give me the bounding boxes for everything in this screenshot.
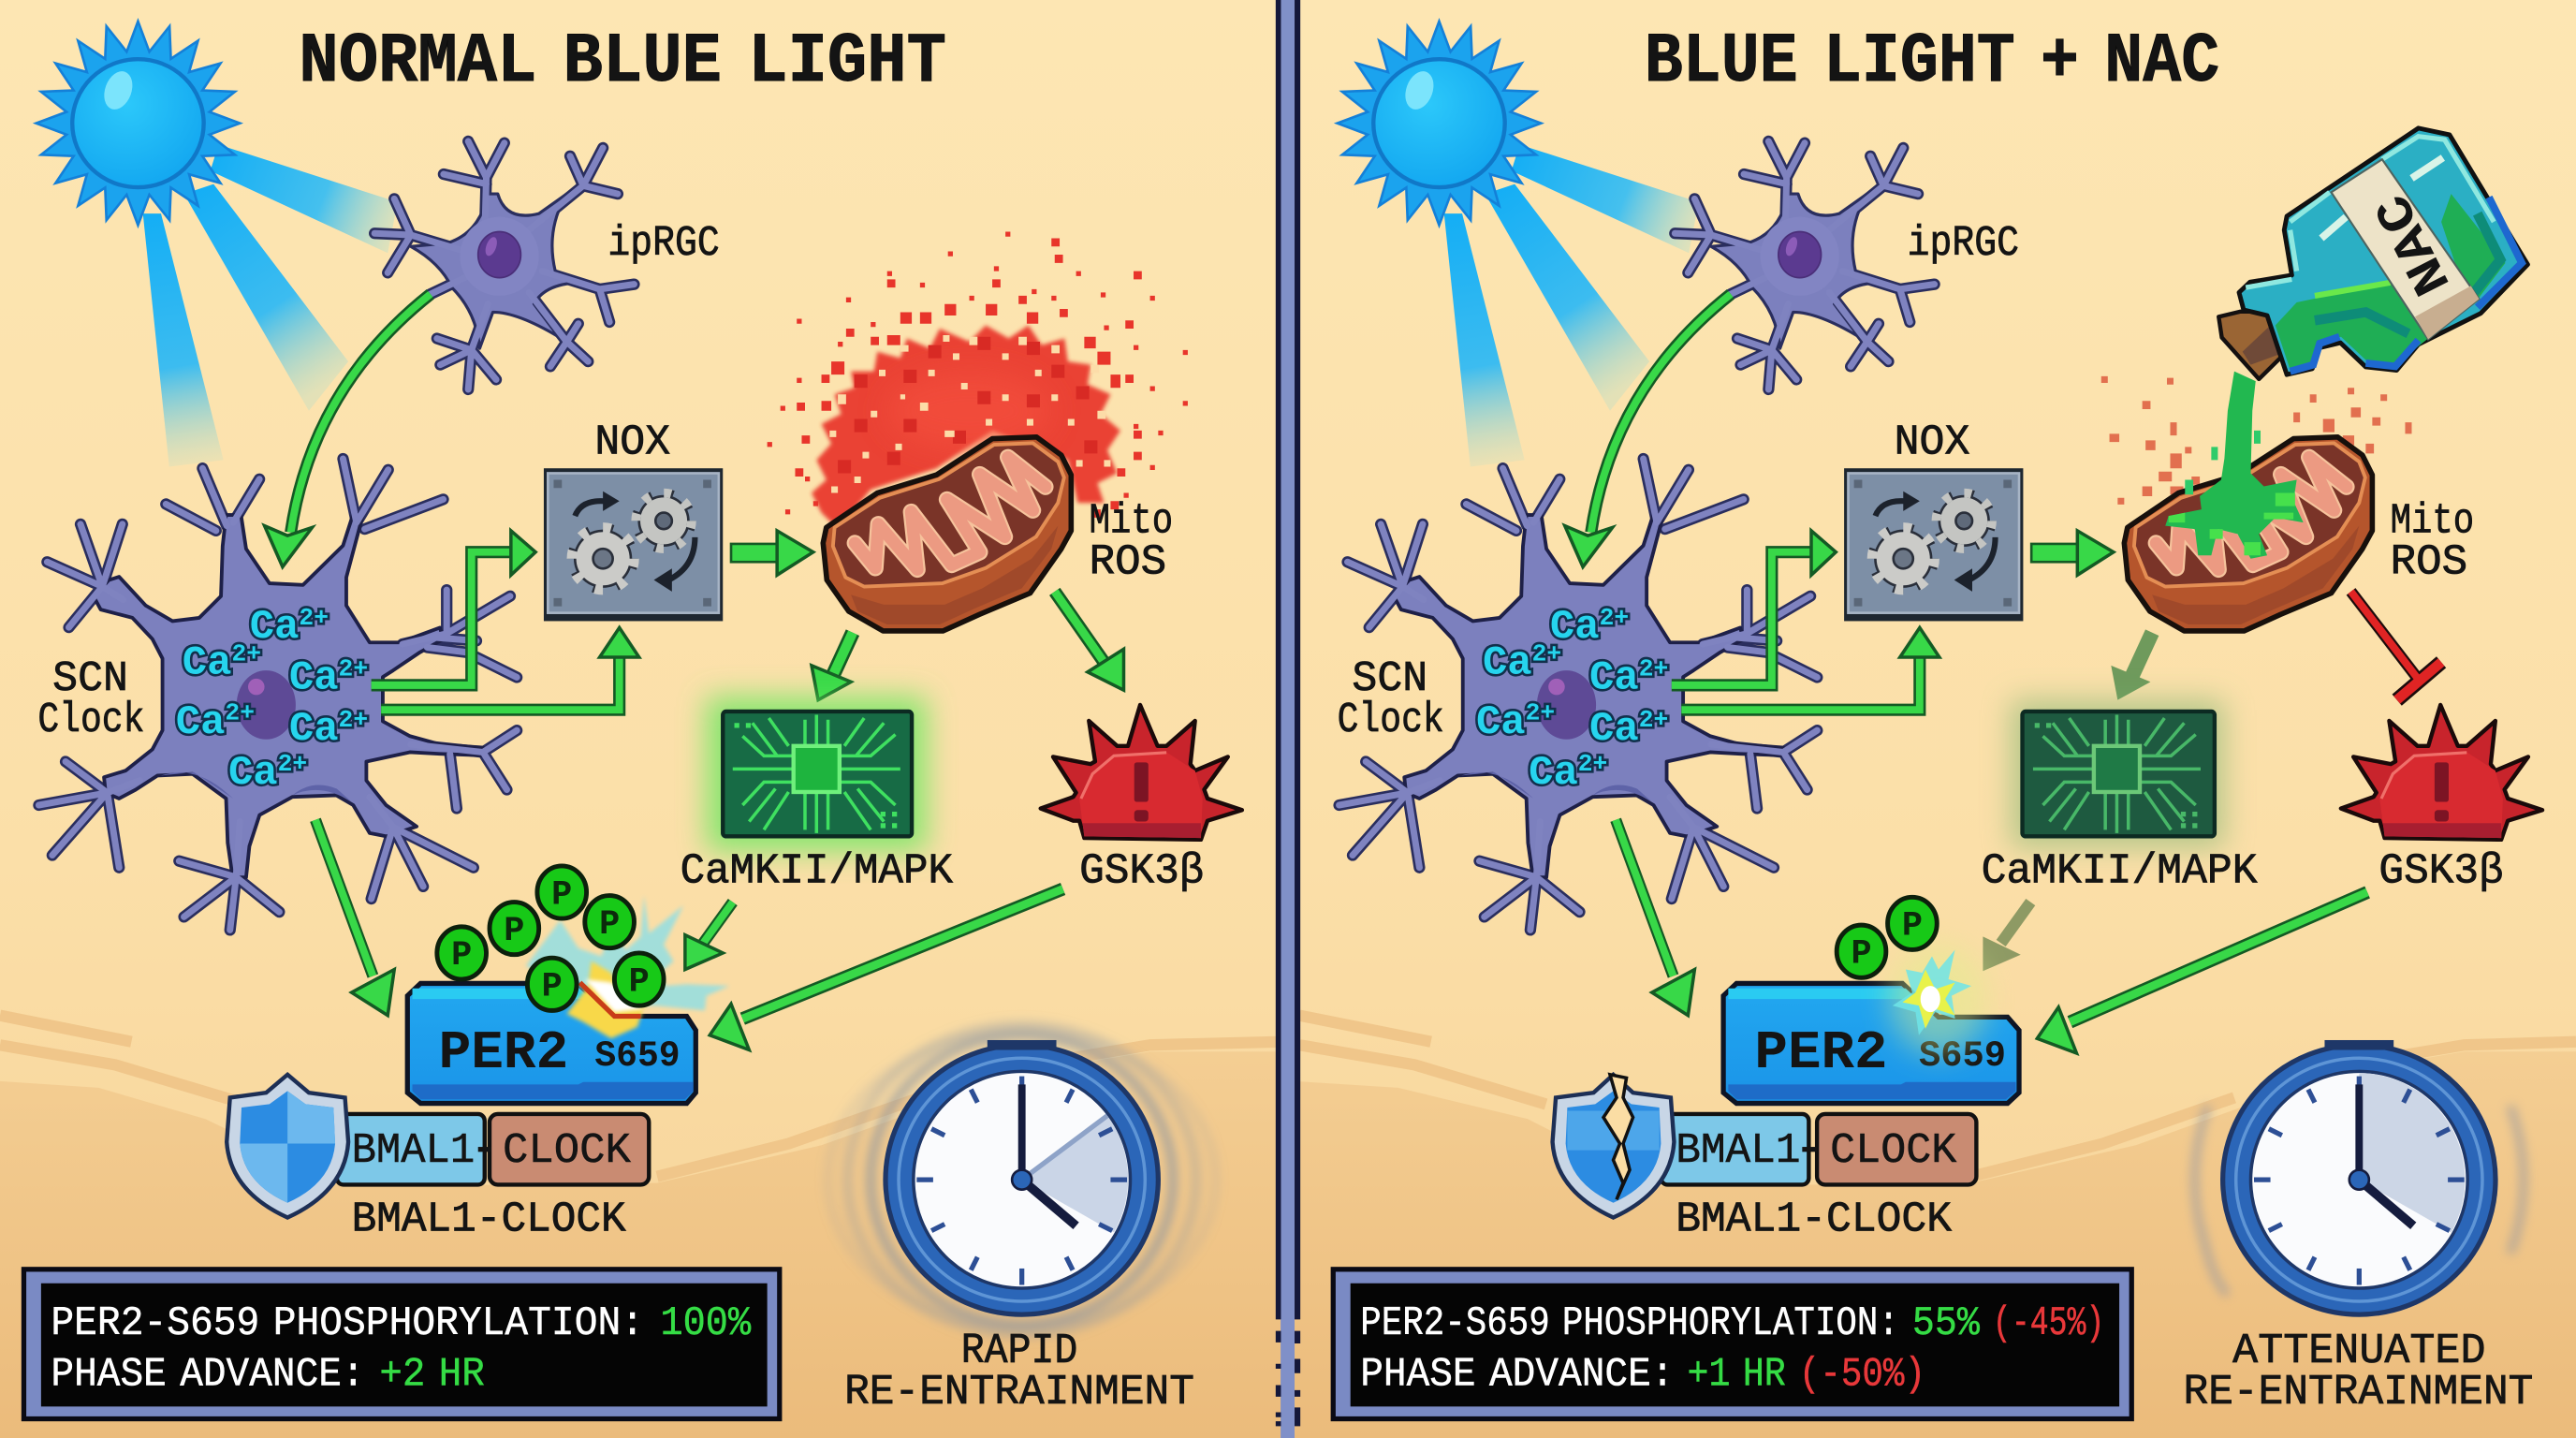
icon: SCN clock neuron with calcium, right: Ca	[1476, 699, 1526, 746]
icon: SCN clock neuron with calcium, right: 2+	[1600, 604, 1629, 632]
arrows: SCN to NOX, left	[372, 531, 639, 710]
arrow: GSK3β to PER2, left	[710, 889, 1063, 1050]
label: SCN Clock, right: Clock	[1338, 696, 1444, 744]
stats panel, left: 100%	[661, 1300, 752, 1347]
label: attenuated re-entrainment: ATTENUATED	[2232, 1327, 2485, 1375]
arrow: GSK3β to PER2, right	[2037, 892, 2367, 1053]
icon: mitochondrion, right	[2124, 437, 2372, 631]
PER2 protein with S659 site, right: S659	[1919, 1035, 2006, 1077]
phosphate groups, right: P	[1851, 934, 1872, 974]
PER2 protein with S659 site, right: PER2	[1754, 1023, 1888, 1084]
stats panel, right: PHASE ADVANCE:	[1360, 1352, 1674, 1399]
title: blue light + NAC: BLUE LIGHT + NAC	[1645, 22, 2219, 102]
icon: SCN clock neuron with calcium, left: 2+	[278, 750, 307, 778]
arrow: faded mitochondrion to CaMKII/MAPK, right	[2111, 633, 2152, 700]
icon: SCN clock neuron with calcium, left: Ca	[176, 699, 225, 746]
phosphate groups, left: P	[542, 968, 563, 1007]
icon: NAC bottle pouring: NAC	[2365, 184, 2465, 304]
label: attenuated re-entrainment	[2184, 1327, 2533, 1416]
phosphate groups, left: P	[629, 962, 650, 1002]
PER2 protein with S659 site, left: PER2	[439, 1023, 568, 1084]
icon: SCN clock neuron with calcium, left: 2+	[339, 654, 368, 682]
icon: SCN clock neuron with calcium, right: 2+	[1532, 640, 1561, 668]
stats panel, right: PER2-S659 PHOSPHORYLATION:	[1360, 1300, 1899, 1347]
phosphate groups, right: P	[1902, 907, 1923, 946]
BMAL1-CLOCK complex, right	[1661, 1114, 1976, 1184]
arrow: mitochondrion to CaMKII/MAPK, left	[812, 633, 853, 700]
BMAL1-CLOCK complex, right: CLOCK	[1830, 1126, 1957, 1175]
icon: SCN clock neuron with calcium, left: Ca	[289, 706, 339, 753]
icon: CaMKII/MAPK chip glowing, left	[707, 697, 927, 851]
icon: SCN clock neuron with calcium, right: 2+	[1639, 706, 1668, 734]
icon: CaMKII/MAPK chip dimmed, right	[2011, 700, 2224, 848]
icon: SCN clock neuron with calcium, left: 2+	[339, 706, 368, 734]
arrows: SCN to NOX, right	[1672, 531, 1939, 710]
centre divider	[1276, 0, 1300, 1438]
label: BMAL1-CLOCK, left: BMAL1-CLOCK	[352, 1196, 626, 1244]
arrow: CaMKII to PER2, left	[685, 902, 733, 970]
icon: SCN clock neuron with calcium, left: Ca	[250, 604, 299, 651]
panel background: blue light + NAC	[1295, 0, 2576, 1438]
arrow: SCN to PER2, right	[1616, 820, 1694, 1016]
inhibition bar: mitochondrion to GSK3β, right	[2351, 592, 2441, 700]
icon: SCN clock neuron with calcium, right: Ca	[1529, 750, 1578, 797]
PER2 protein with S659 site, left	[407, 983, 695, 1104]
arrow: NOX to mitochondrion, left	[731, 531, 813, 575]
arrow: mitochondrion to GSK3β, left	[1055, 592, 1123, 690]
label: ipRGC, left: ipRGC	[607, 219, 720, 268]
label: Mito ROS, right	[2391, 497, 2474, 587]
label: SCN Clock, left: Clock	[37, 696, 144, 744]
icon: SCN clock neuron with calcium, right: Ca	[1589, 654, 1639, 701]
label: BMAL1-CLOCK, right: BMAL1-CLOCK	[1676, 1196, 1953, 1244]
icon: GSK3β spiky enzyme, left	[1041, 705, 1242, 840]
label: rapid re-entrainment: RE-ENTRAINMENT	[844, 1368, 1194, 1416]
icon: SCN clock neuron with calcium, right: Ca	[1589, 706, 1639, 753]
label: CaMKII/MAPK, right: CaMKII/MAPK	[1982, 846, 2258, 895]
icon: clock with motion blur, left	[828, 1025, 1216, 1334]
icon: intact shield, left	[227, 1075, 348, 1218]
icon: SCN clock neuron with calcium, left: Ca	[183, 640, 231, 687]
icon: SCN clock neuron with calcium, left: Ca	[289, 654, 339, 701]
stats panel, left: PHASE ADVANCE:	[51, 1352, 365, 1399]
icon: NOX gears box, right	[1844, 468, 2023, 621]
icon: mitochondrion, left	[823, 437, 1071, 631]
label: GSK3β, right: GSK3β	[2378, 846, 2504, 895]
icon: SCN clock neuron with calcium, right: 2+	[1578, 750, 1607, 778]
stats panel, left	[22, 1267, 782, 1421]
stats panel, right: 55%	[1912, 1300, 1981, 1347]
green NAC stream and splash on mitochondrion	[2165, 372, 2304, 559]
arrow: NOX to mitochondrion, right	[2031, 531, 2114, 575]
phosphorylation spark, right	[1889, 943, 1988, 1055]
label: NOX, right: NOX	[1895, 418, 1969, 466]
icon: SCN clock neuron with calcium, left: 2+	[299, 604, 329, 632]
arrow: ipRGC to SCN, left	[265, 294, 431, 567]
icon: SCN clock neuron with calcium, right: 2+	[1526, 699, 1555, 727]
phosphate groups, left: P	[551, 875, 572, 915]
label: NOX, left: NOX	[594, 418, 670, 466]
stats panel, left: PER2-S659 PHOSPHORYLATION:	[51, 1300, 644, 1347]
stats panel, right: (-45%)	[1993, 1300, 2104, 1347]
stats panel, right: (-50%)	[1799, 1352, 1925, 1399]
panel background: normal blue light	[0, 0, 1281, 1438]
faded ROS particles, right	[2101, 376, 2411, 505]
icon: blue sun with light beams, left	[37, 22, 398, 466]
icon: SCN clock neuron with calcium, right	[1339, 459, 1817, 930]
stats panel, right: +1 HR	[1687, 1352, 1786, 1399]
label: SCN Clock, right	[1338, 654, 1444, 744]
PER2 protein with S659 site, right	[1723, 983, 2019, 1104]
label: attenuated re-entrainment: RE-ENTRAINMENT	[2184, 1368, 2533, 1416]
label: rapid re-entrainment	[844, 1327, 1194, 1416]
label: rapid re-entrainment: RAPID	[961, 1327, 1077, 1375]
stats panel, left: +2 HR	[379, 1352, 485, 1399]
icon: SCN clock neuron with calcium, right: Ca	[1483, 640, 1532, 687]
phosphate groups, left	[437, 866, 664, 1010]
label: CaMKII/MAPK, left: CaMKII/MAPK	[681, 846, 954, 895]
icon: SCN clock neuron with calcium, left: 2+	[225, 699, 255, 727]
label: Mito ROS, right: ROS	[2391, 538, 2467, 587]
label: GSK3β, left: GSK3β	[1079, 846, 1204, 895]
icon: NOX gears box, left	[544, 468, 723, 621]
icon: SCN clock neuron with calcium, left	[38, 459, 517, 930]
phosphate groups, left: P	[599, 905, 620, 945]
title: normal blue light: NORMAL BLUE LIGHT	[299, 22, 946, 102]
icon: cracked shield, right	[1553, 1075, 1674, 1218]
icon: ipRGC neuron, left	[374, 141, 634, 389]
icon: clock with slight motion, right	[2195, 1040, 2524, 1314]
arrow: ipRGC to SCN, right	[1565, 294, 1731, 567]
icon: GSK3β spiky enzyme, right	[2341, 705, 2542, 840]
red ROS particle cloud, left	[768, 231, 1188, 529]
PER2 protein with S659 site, left: S659	[594, 1035, 681, 1077]
icon: SCN clock neuron with calcium, left: 2+	[231, 640, 261, 668]
BMAL1-CLOCK complex, left	[337, 1114, 649, 1184]
icon: SCN clock neuron with calcium, right: Ca	[1550, 604, 1600, 651]
label: Mito ROS, left	[1090, 497, 1173, 587]
phosphorylation spark, left	[526, 896, 729, 1038]
label: Mito ROS, right: Mito	[2391, 497, 2474, 546]
icon: ipRGC neuron, right	[1675, 141, 1935, 389]
label: Mito ROS, left: Mito	[1090, 497, 1173, 546]
BMAL1-CLOCK complex, left: CLOCK	[503, 1126, 632, 1175]
label: SCN Clock, left	[37, 654, 144, 744]
icon: NAC bottle pouring	[2218, 128, 2527, 379]
phosphate groups, right	[1837, 897, 1937, 977]
icon: SCN clock neuron with calcium, right: 2+	[1639, 654, 1668, 682]
stats panel, right	[1331, 1267, 2134, 1421]
phosphate groups, left: P	[451, 936, 472, 976]
label: SCN Clock, right: SCN	[1352, 654, 1427, 703]
icon: SCN clock neuron with calcium, left: Ca	[228, 750, 278, 797]
label: Mito ROS, left: ROS	[1090, 538, 1166, 587]
label: ipRGC, right: ipRGC	[1908, 219, 2019, 268]
BMAL1-CLOCK complex, left: BMAL1	[352, 1126, 475, 1175]
arrow: faded CaMKII to PER2, right	[1983, 902, 2030, 971]
label: SCN Clock, left: SCN	[52, 654, 128, 703]
BMAL1-CLOCK complex, right: BMAL1	[1676, 1126, 1801, 1175]
phosphate groups, left: P	[504, 912, 524, 951]
icon: blue sun with light beams, right	[1338, 22, 1699, 466]
arrow: SCN to PER2, left	[315, 820, 394, 1016]
